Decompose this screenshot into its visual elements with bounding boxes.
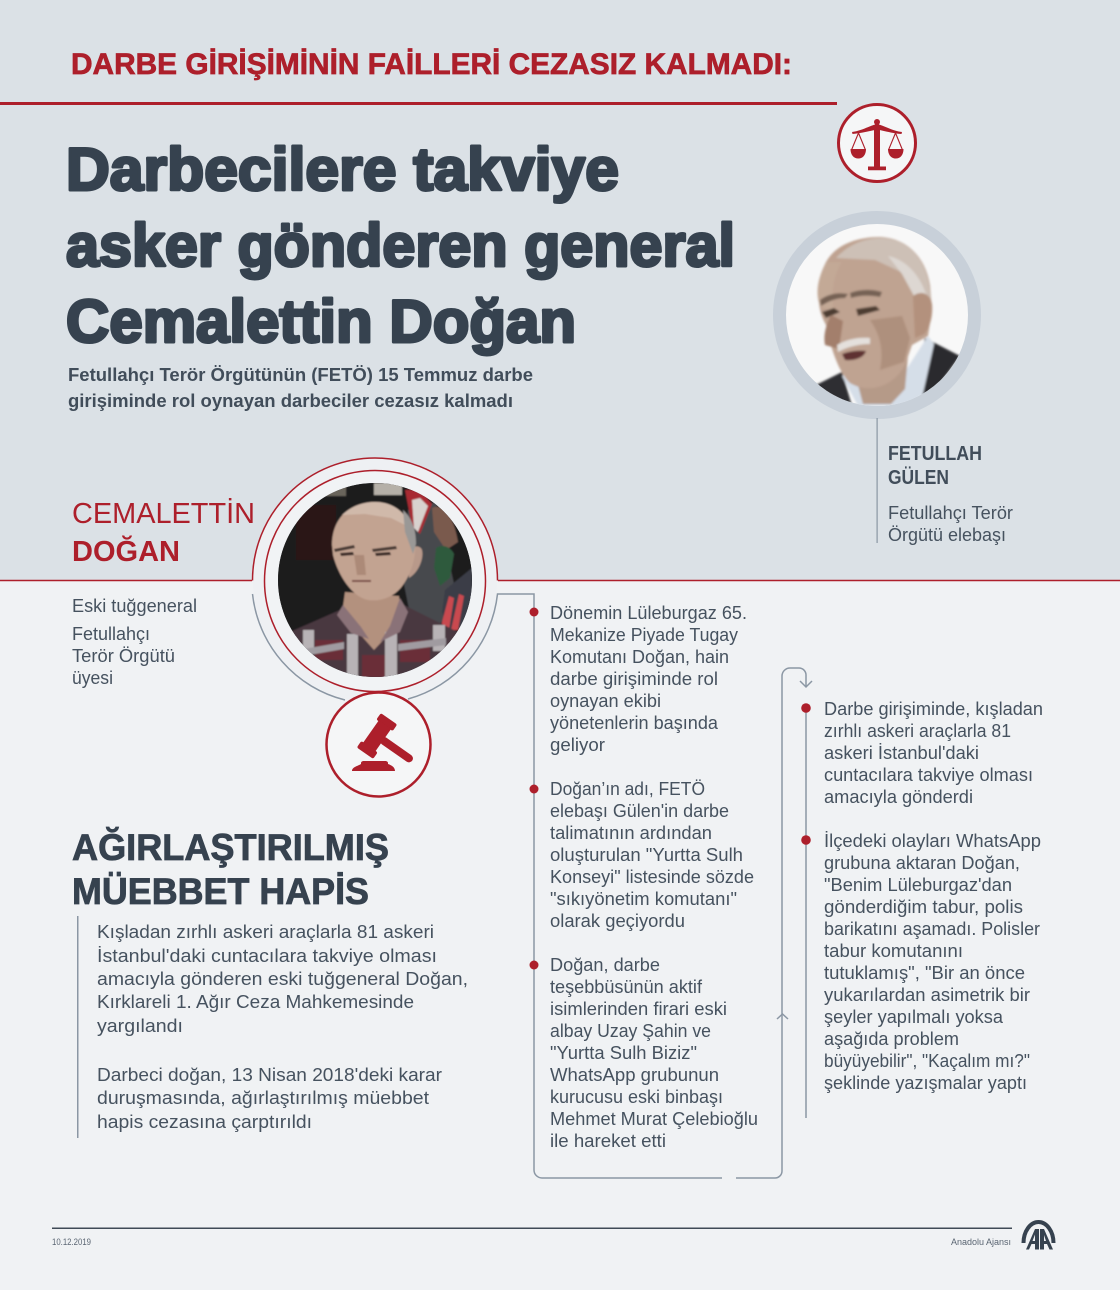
- section divider line: [0, 580, 1120, 582]
- caption: Fetullah Gülen: Örgütü elebaşı: [888, 525, 1006, 545]
- bullet 3: column one: [530, 955, 758, 1151]
- subtitle: Fetullahçı Terör Örgütünün (FETÖ) 15 Temmuz darbe: [68, 365, 533, 385]
- portrait: Fetullah Gülen: [780, 218, 974, 412]
- bullet 2: column two: İlçedeki olayları WhatsApp: [824, 831, 1041, 851]
- icon: Anadolu Agency logo: [1024, 1222, 1054, 1250]
- icon: scales of justice: [838, 104, 916, 182]
- bullet 2: column two: tutuklamış", "Bir an önce: [824, 963, 1025, 983]
- text block: sentence details: amacıyla gönderen eski tuğgeneral Doğan,: [97, 969, 468, 989]
- bullet 2: column two: yukarılardan asimetrik bir: [824, 985, 1030, 1005]
- bullet 1: column two: [801, 699, 1043, 807]
- bullet 3: column one: "Yurtta Sulh Biziz": [550, 1043, 697, 1063]
- bullet 3: column one: kurucusu eski binbaşı: [550, 1087, 723, 1107]
- bullet 3: column one: Doğan, darbe: [550, 955, 660, 975]
- subtitle: [68, 365, 533, 411]
- text block: sentence details: İstanbul'daki cuntacılara takviye olması: [97, 946, 437, 966]
- bullet 3: column one: isimlerinden firari eski: [550, 999, 727, 1019]
- bullet 1: column two: Darbe girişiminde, kışladan: [824, 699, 1043, 719]
- title: Cemalettin Doğan: [66, 288, 576, 355]
- bullet 1: column two: amacıyla gönderdi: [824, 787, 973, 807]
- footer credit: Anadolu Ajansı: [951, 1237, 1011, 1247]
- bullet 1: column two: askeri İstanbul'daki: [824, 743, 979, 763]
- footer rule: [52, 1228, 1012, 1229]
- bullet 1: column one: geliyor: [550, 735, 605, 755]
- bullet 1: column one: Mekanize Piyade Tugay: [550, 625, 738, 645]
- heading: sentence: [72, 827, 389, 912]
- text: rank and affiliation: üyesi: [72, 668, 113, 688]
- bullet 2: column two: aşağıda problem: [824, 1029, 959, 1049]
- text: rank and affiliation: Eski tuğgeneral: [72, 596, 197, 616]
- connector: grey flow line around portrait: [252, 594, 812, 1178]
- bullet 2: column one: Doğan’ın adı, FETÖ: [550, 779, 705, 799]
- bullet 2: column one: olarak geçiyordu: [550, 911, 685, 931]
- text block: sentence details: yargılandı: [97, 1016, 183, 1036]
- caption: Fetullah Gülen: GÜLEN: [888, 466, 949, 489]
- caption: Fetullah Gülen: FETULLAH: [888, 443, 982, 465]
- bullet 2: column two: barikatını aşamadı. Polisler: [824, 919, 1040, 939]
- bullet 1: column one: oynayan ekibi: [550, 691, 661, 711]
- connector: Gülen caption line: [876, 418, 878, 543]
- bullet 2: column two: şeyler yapılmalı yoksa: [824, 1007, 1004, 1027]
- bullet 1: column one: Komutanı Doğan, hain: [550, 647, 729, 667]
- background: lower section: [0, 580, 1120, 1290]
- text block: sentence details: [97, 922, 468, 1132]
- bullet 2: column two: şeklinde yazışmalar yaptı: [824, 1073, 1027, 1093]
- bullet 3: column one: teşebbüsünün aktif: [550, 977, 703, 997]
- bullet 2: column one: elebaşı Gülen'in darbe: [550, 801, 729, 821]
- title: [66, 136, 735, 355]
- text: rank and affiliation: Fetullahçı: [72, 624, 150, 644]
- text: rank and affiliation: Terör Örgütü: [72, 646, 175, 666]
- name: Cemalettin Doğan: [72, 497, 255, 568]
- background: upper section: [0, 0, 1120, 580]
- heading: sentence: MÜEBBET HAPİS: [72, 871, 369, 912]
- bullet 2: column two: büyüyebilir", "Kaçalım mı?": [824, 1051, 1030, 1071]
- rule: sentence text: [77, 916, 78, 1138]
- header kicker: DARBE GİRİŞİMİNİN FAİLLERİ CEZASIZ KALMADI:: [71, 48, 792, 81]
- bullet 2: column two: "Benim Lüleburgaz'dan: [824, 875, 1012, 895]
- text block: sentence details: Kışladan zırhlı askeri araçlarla 81 askeri: [97, 922, 434, 942]
- text block: sentence details: hapis cezasına çarptırıldı: [97, 1112, 312, 1132]
- bullet 1: column one: [530, 603, 747, 755]
- bullet 2: column two: tabur komutanını: [824, 941, 963, 961]
- heading: sentence: AĞIRLAŞTIRILMIŞ: [72, 827, 389, 868]
- bullet 3: column one: albay Uzay Şahin ve: [550, 1021, 711, 1041]
- bullet 2: column two: [801, 831, 1041, 1093]
- bullet 1: column two: cuntacılara takviye olması: [824, 765, 1033, 785]
- bullet 1: column one: yönetenlerin başında: [550, 713, 719, 733]
- footer date: 10.12.2019: [52, 1237, 91, 1247]
- title: Darbecilere takviye: [66, 136, 619, 203]
- icon: gavel: [326, 692, 430, 796]
- text: rank and affiliation: [72, 596, 197, 688]
- header rule: [0, 102, 837, 105]
- bullet 2: column two: grubuna aktaran Doğan,: [824, 853, 1020, 873]
- bullet 2: column one: oluşturulan "Yurtta Sulh: [550, 845, 743, 865]
- title: asker gönderen general: [66, 212, 735, 279]
- portrait: Cemalettin Doğan: [252, 458, 498, 702]
- bullet 2: column two: gönderdiğim tabur, polis: [824, 897, 1023, 917]
- text block: sentence details: Kırklareli 1. Ağır Ceza Mahkemesinde: [97, 992, 414, 1012]
- bullet 2: column one: talimatının ardından: [550, 823, 712, 843]
- caption: Fetullah Gülen: [888, 443, 1013, 545]
- bullet 2: column one: [530, 779, 754, 931]
- subtitle: girişiminde rol oynayan darbeciler cezasız kalmadı: [68, 391, 513, 411]
- bullet 1: column one: Dönemin Lüleburgaz 65.: [550, 603, 747, 623]
- bullet 1: column one: darbe girişiminde rol: [550, 669, 718, 689]
- bullet 1: column two: zırhlı askeri araçlarla 81: [824, 721, 1011, 741]
- caption: Fetullah Gülen: Fetullahçı Terör: [888, 503, 1013, 523]
- text block: sentence details: duruşmasında, ağırlaştırılmış müebbet: [97, 1088, 429, 1108]
- name: Cemalettin Doğan: DOĞAN: [72, 534, 180, 568]
- bullet 2: column one: Konseyi" listesinde sözde: [550, 867, 754, 887]
- text block: sentence details: Darbeci doğan, 13 Nisan 2018'deki karar: [97, 1065, 442, 1085]
- bullet 2: column one: "sıkıyönetim komutanı": [550, 889, 737, 909]
- bullet 3: column one: ile hareket etti: [550, 1131, 666, 1151]
- bullet 3: column one: Mehmet Murat Çelebioğlu: [550, 1109, 758, 1129]
- bullet 3: column one: WhatsApp grubunun: [550, 1065, 719, 1085]
- name: Cemalettin Doğan: CEMALETTİN: [72, 497, 255, 530]
